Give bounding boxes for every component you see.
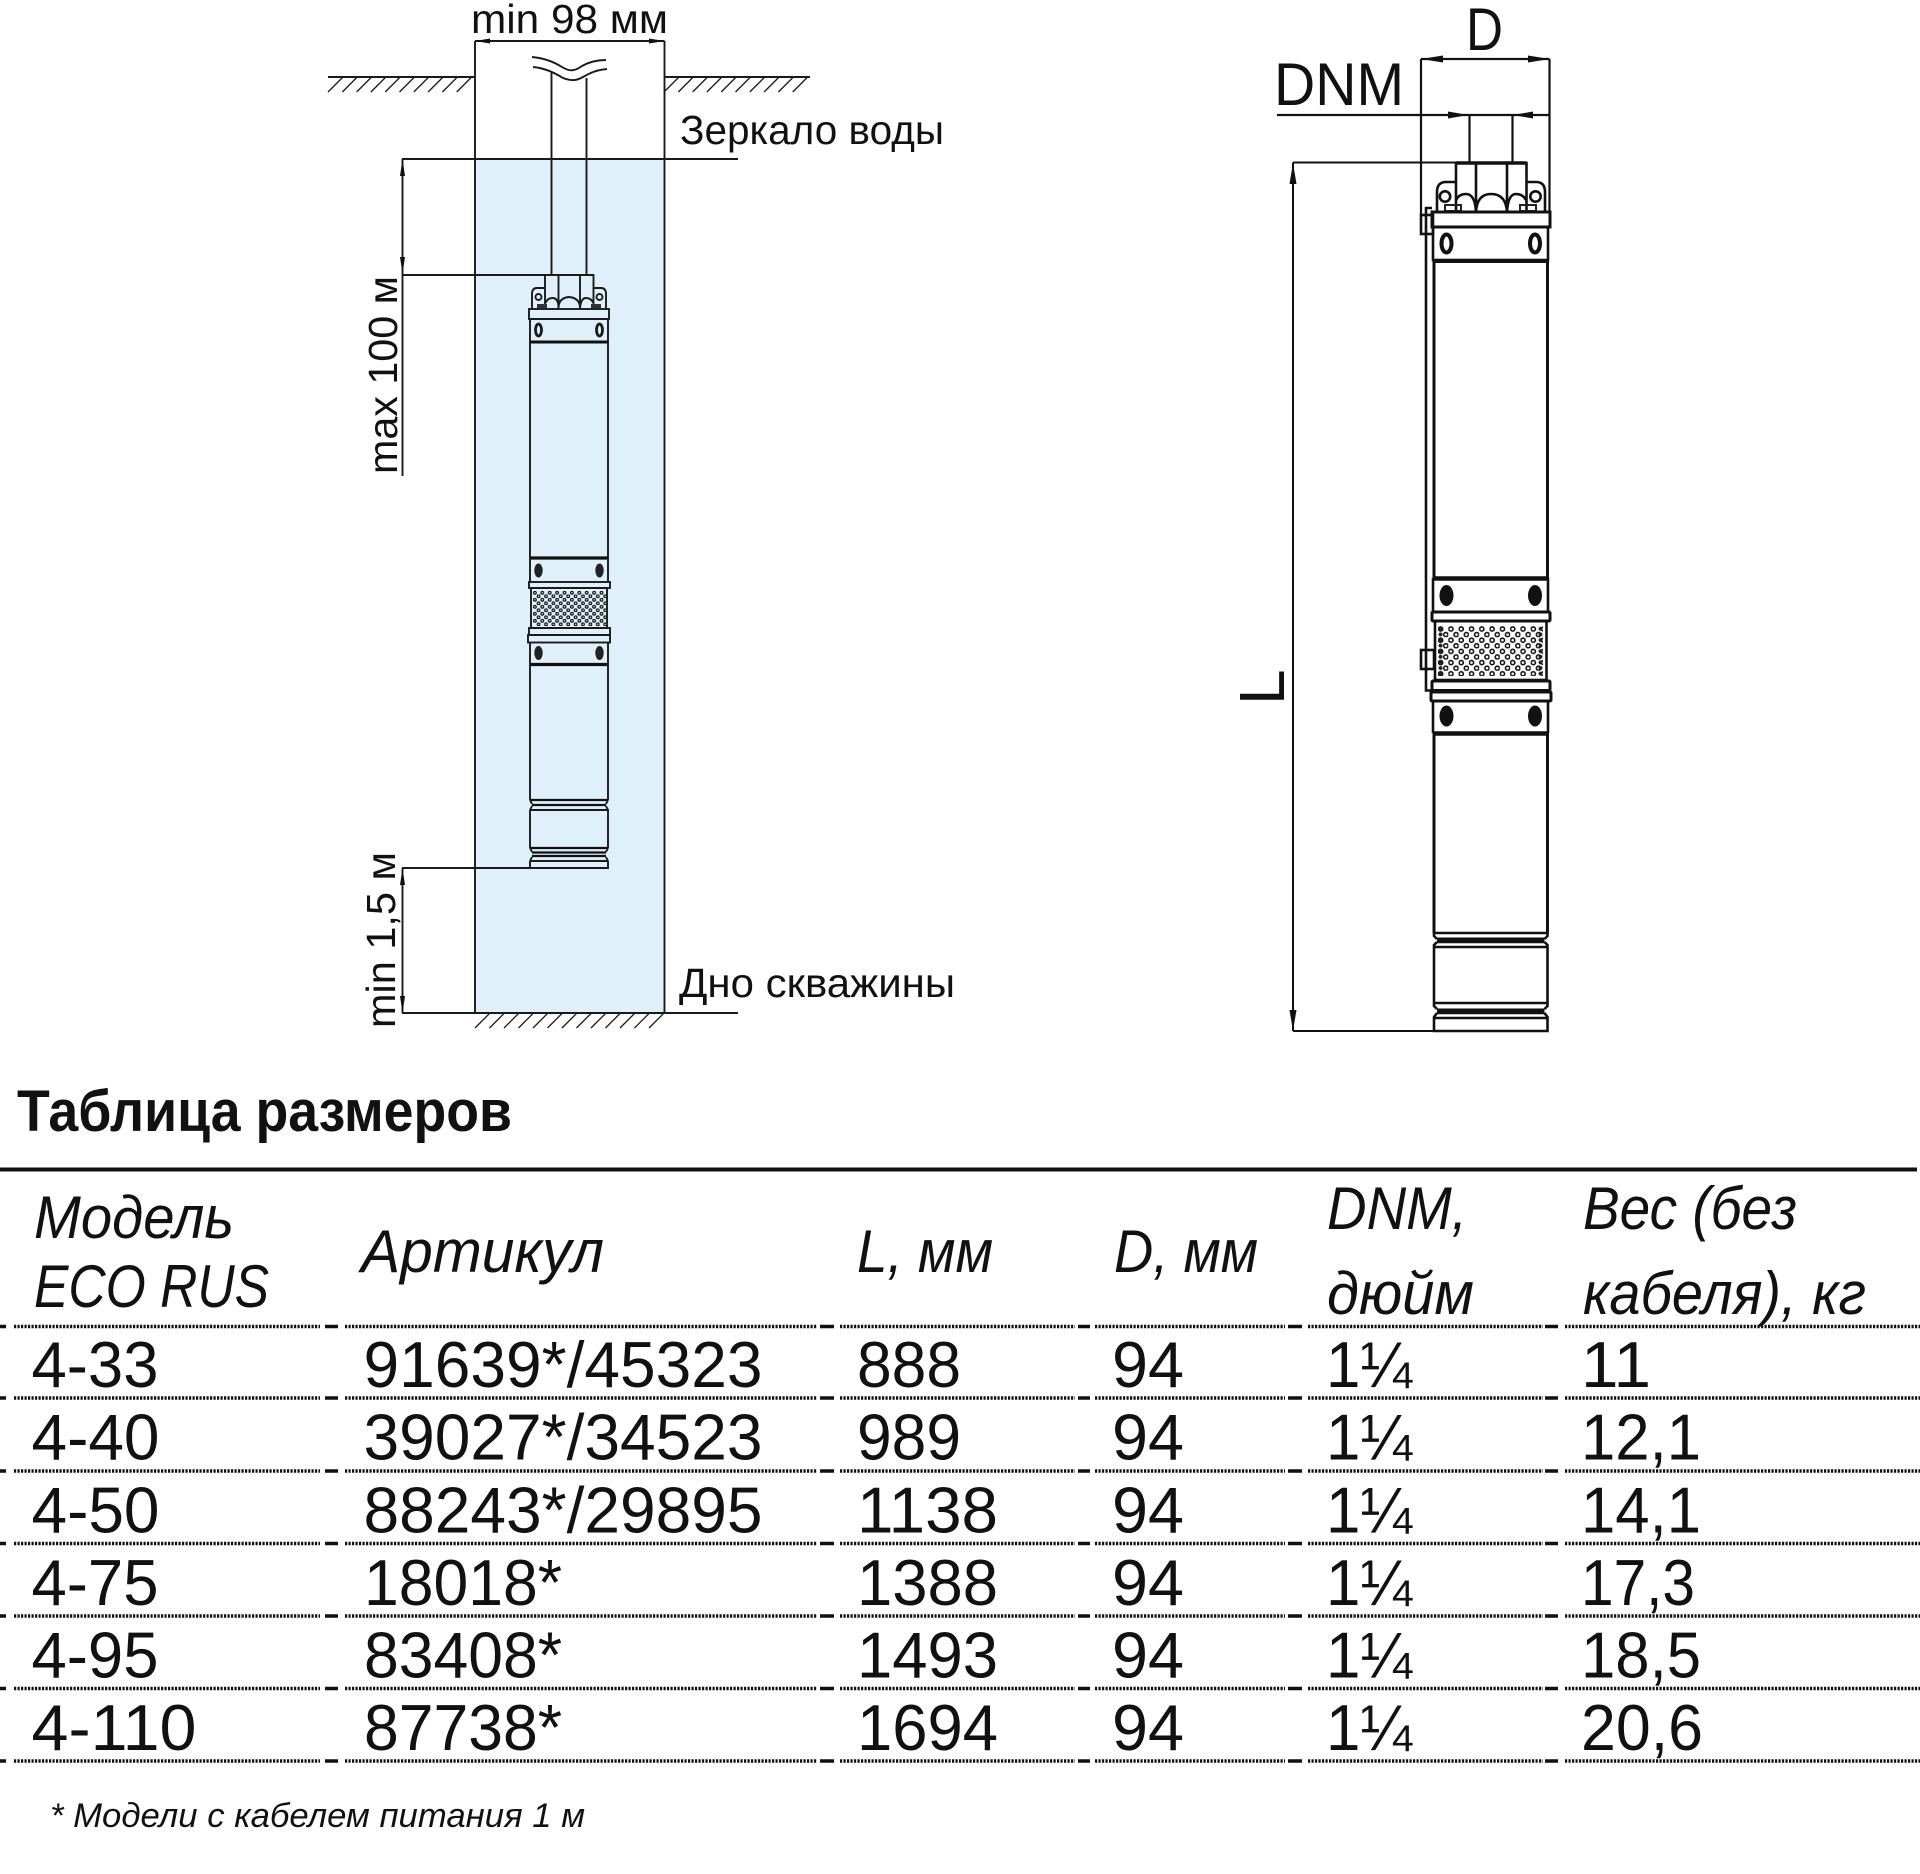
row 4-40: 94 — [1112, 1400, 1184, 1474]
row 4-40: 4-40 — [32, 1400, 160, 1474]
row 4-50: 1¼ — [1326, 1474, 1413, 1546]
dimension: L — [1226, 162, 1456, 1031]
dimension: L: L — [1226, 669, 1298, 705]
water column in the borehole — [475, 159, 664, 1013]
table header row: L, мм — [857, 1218, 993, 1285]
row 4-75: 1¼ — [1326, 1546, 1413, 1619]
dimension: max 100 m: max 100 м — [360, 276, 406, 474]
middle band — [1433, 576, 1548, 581]
row 4-50: 4-50 — [32, 1474, 160, 1546]
row 4-33 — [32, 1328, 1651, 1401]
table header row: Артикул — [358, 1218, 604, 1285]
row 4-75: 94 — [1112, 1546, 1184, 1619]
cable with clips — [1426, 208, 1432, 690]
label: water level: Зеркало воды — [680, 107, 944, 153]
row 4-75: 4-75 — [32, 1546, 158, 1619]
table header row: дюйм — [1327, 1260, 1474, 1327]
dimension: D — [1421, 0, 1550, 216]
table top rule — [0, 1168, 1917, 1172]
borehole bottom line with hatching — [402, 1013, 738, 1028]
dotted row separators — [0, 1326, 1920, 1761]
intake screen — [531, 588, 607, 628]
upper collar and band — [1432, 212, 1550, 227]
row 4-33: 94 — [1112, 1328, 1184, 1401]
row 4-110: 4-110 — [32, 1691, 196, 1764]
row 4-50 — [32, 1474, 1701, 1546]
row 4-40: 12,1 — [1581, 1400, 1701, 1474]
dimension: DNM: DNM — [1274, 51, 1404, 118]
table header row: Вес (без — [1583, 1175, 1797, 1242]
pump, large view — [1421, 163, 1551, 1031]
row 4-75: 18018* — [364, 1546, 562, 1619]
dimension: min 1.5 m: min 1,5 м — [358, 852, 404, 1028]
row 4-95: 18,5 — [1581, 1618, 1701, 1692]
row 4-33: 4-33 — [32, 1328, 158, 1401]
row 4-50: 14,1 — [1581, 1474, 1701, 1546]
row 4-33: 888 — [857, 1328, 961, 1401]
footnote: * Модели с кабелем питания 1 м — [50, 1797, 585, 1835]
row 4-40: 39027*/34523 — [364, 1400, 762, 1474]
row 4-110: 94 — [1112, 1691, 1184, 1764]
table header row: D, мм — [1114, 1218, 1258, 1285]
pump head — [1456, 163, 1526, 212]
row 4-33: 91639*/45323 — [364, 1328, 762, 1401]
table header row: кабеля), кг — [1583, 1260, 1866, 1327]
heading: size table: Таблица размеров — [17, 1079, 512, 1144]
diagram: pump installed in borehole — [328, 0, 955, 1028]
ground surface with hatching — [328, 77, 810, 92]
row 4-95: 1¼ — [1326, 1618, 1413, 1692]
upper collar and band — [529, 309, 609, 319]
dimension: DNM — [1274, 51, 1550, 163]
cable break symbol and riser pipe — [532, 57, 607, 275]
submersible pump, small view — [528, 275, 610, 868]
row 4-40: 1¼ — [1326, 1400, 1413, 1474]
pump body lower — [530, 664, 608, 800]
row 4-75: 1388 — [857, 1546, 998, 1619]
row 4-40: 989 — [857, 1400, 961, 1474]
dimension: max 100 m — [360, 159, 545, 476]
row 4-110 — [32, 1691, 1703, 1764]
borehole walls — [475, 41, 664, 1013]
pump bottom extension line — [402, 867, 530, 869]
lower collar and band — [1432, 681, 1550, 690]
row 4-110: 1¼ — [1326, 1691, 1413, 1764]
row 4-95 — [32, 1618, 1701, 1692]
row 4-110: 1694 — [857, 1691, 998, 1764]
pump head — [545, 275, 594, 308]
table header row: Модель — [34, 1184, 234, 1251]
row 4-95: 1493 — [857, 1618, 998, 1692]
row 4-50: 94 — [1112, 1474, 1184, 1546]
row 4-110: 87738* — [364, 1691, 562, 1764]
size table — [0, 1168, 1920, 1764]
table header row: DNM, — [1327, 1175, 1467, 1242]
table header row: ECO RUS — [34, 1253, 269, 1320]
row 4-75 — [32, 1546, 1695, 1619]
table header row — [34, 1175, 1866, 1327]
row 4-95: 94 — [1112, 1618, 1184, 1692]
lower collar and band — [529, 628, 610, 635]
row 4-33: 11 — [1581, 1328, 1651, 1401]
middle band — [530, 556, 608, 560]
row 4-50: 1138 — [857, 1474, 998, 1546]
row 4-40 — [32, 1400, 1701, 1474]
lower pump body — [1434, 733, 1548, 933]
intake screen — [1435, 621, 1546, 680]
water level line — [402, 158, 738, 160]
label: borehole bottom: Дно скважины — [679, 960, 955, 1006]
motor section — [530, 342, 608, 558]
row 4-33: 1¼ — [1326, 1328, 1413, 1401]
row 4-95: 4-95 — [32, 1618, 158, 1692]
row 4-110: 20,6 — [1581, 1691, 1703, 1764]
row 4-50: 88243*/29895 — [364, 1474, 762, 1546]
row 4-75: 17,3 — [1581, 1546, 1695, 1619]
diagram: pump dimensions — [1226, 0, 1551, 1031]
row 4-95: 83408* — [364, 1618, 562, 1692]
motor section — [1434, 261, 1548, 578]
